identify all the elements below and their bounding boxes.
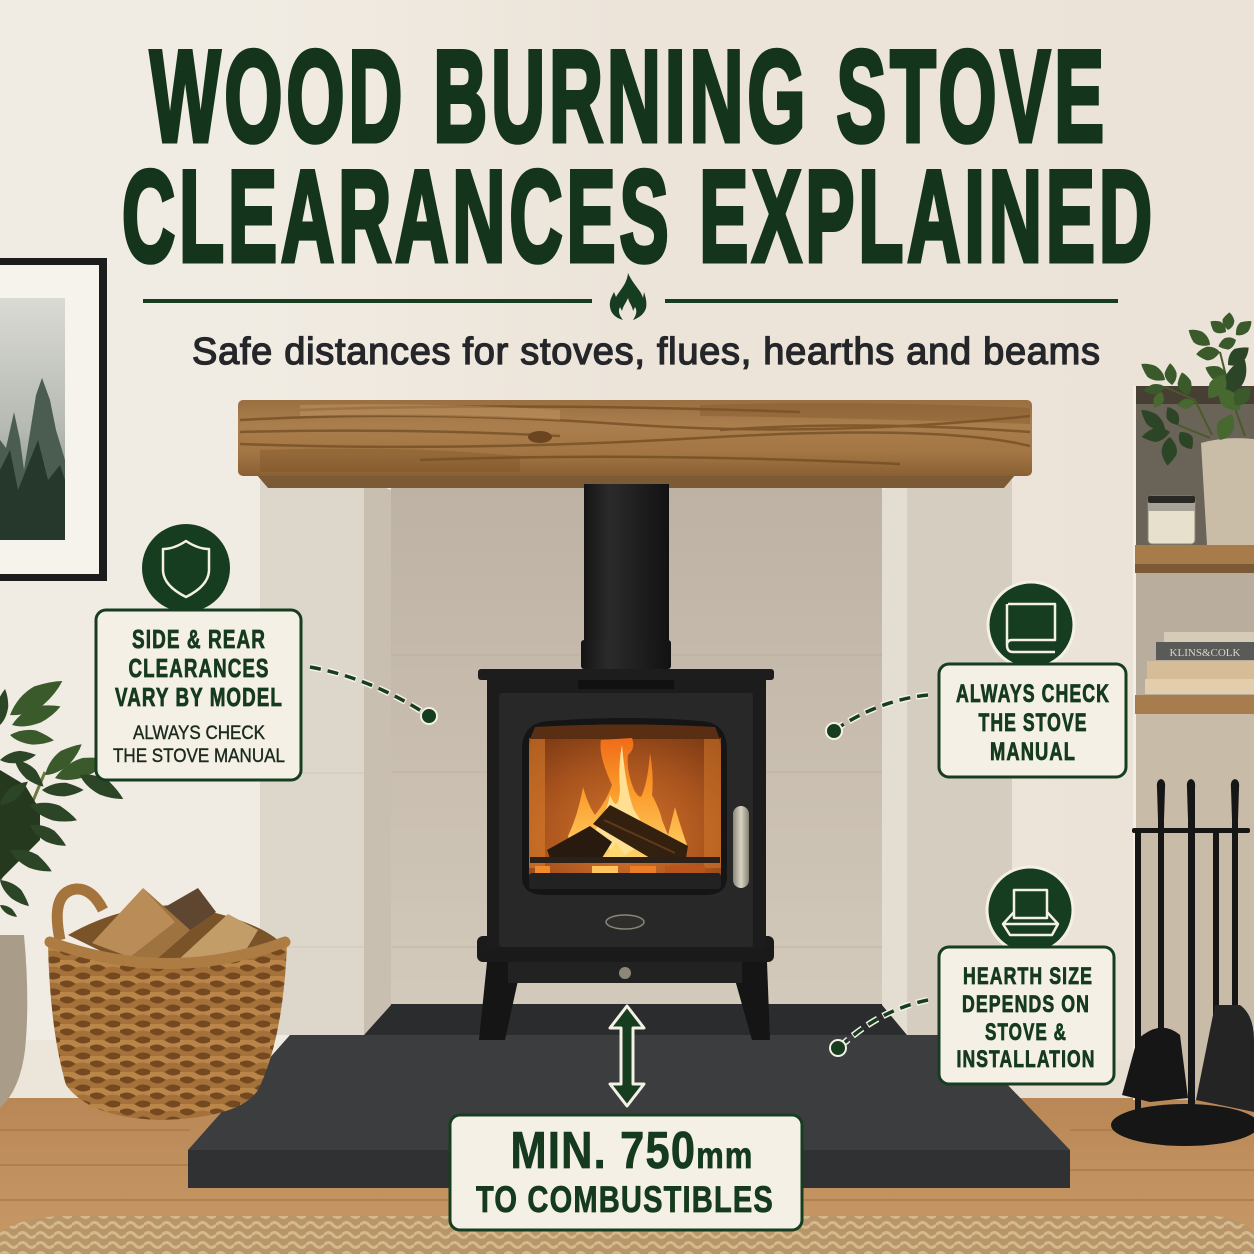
text card: MANUAL [990, 738, 1076, 766]
left pot [0, 935, 27, 1108]
text card [939, 664, 1126, 777]
text card: INSTALLATION [956, 1046, 1096, 1073]
icon: shield [142, 524, 230, 612]
oak mantel beam [238, 400, 1032, 488]
leader line and dot [310, 667, 437, 724]
logs [547, 826, 612, 858]
text card: SIDE & REAR [132, 624, 266, 654]
log basket [48, 888, 287, 1120]
text card: THE STOVE [978, 709, 1088, 737]
subtitle: Safe distances for stoves, flues, hearths and beams [192, 331, 1100, 373]
icon: hearth [987, 867, 1073, 953]
leader line and dot [830, 1000, 928, 1056]
upper shelf [1135, 545, 1254, 573]
base front [508, 962, 742, 983]
candle jar [1148, 496, 1195, 544]
skirting board [0, 1040, 1136, 1100]
stack of books [1145, 632, 1254, 694]
rug [0, 1216, 1254, 1254]
fireplace back wall [391, 488, 882, 1008]
text card: CLEARANCES [128, 653, 270, 683]
callout: hearth size [830, 867, 1114, 1084]
shelf plant [1136, 312, 1254, 466]
grate [530, 857, 720, 863]
main label: min 750mm: TO COMBUSTIBLES [476, 1179, 774, 1220]
stack of books: KLINS&COLK [1170, 647, 1240, 659]
divider with flame icon [143, 273, 1118, 320]
fireside tool set [1111, 779, 1254, 1146]
callout: side and rear clearances [96, 524, 437, 780]
right fireplace pillar [882, 480, 1012, 1035]
left plant [0, 672, 127, 920]
flames [568, 738, 687, 860]
right shelving alcove [1133, 312, 1254, 1100]
door handle [733, 806, 749, 888]
title [122, 23, 1156, 289]
brush [1122, 1028, 1188, 1102]
text card: ALWAYS CHECK [133, 723, 265, 744]
icon: manual book [988, 582, 1074, 668]
shovel [1196, 1005, 1254, 1112]
main label: min 750mm: MIN. 750mm [510, 1122, 754, 1180]
stove legs [479, 962, 522, 1040]
text card: THE STOVE MANUAL [113, 746, 285, 767]
stove door [499, 693, 753, 947]
wood floor [0, 1098, 1254, 1254]
lower shelf [1135, 695, 1254, 714]
text card: STOVE & [985, 1019, 1067, 1046]
text card: ALWAYS CHECK [956, 680, 1110, 708]
text card: VARY BY MODEL [115, 682, 283, 712]
ash door knob [606, 915, 644, 929]
text card: DEPENDS ON [962, 991, 1090, 1018]
text card: HEARTH SIZE [963, 963, 1093, 990]
fire window [522, 718, 727, 895]
text card [96, 610, 301, 780]
leader line and dot [826, 695, 928, 739]
flue pipe [581, 484, 671, 669]
callout: always check the manual [826, 582, 1126, 777]
text card [939, 947, 1114, 1084]
wood burning stove [477, 669, 774, 1040]
double headed height arrow [610, 1006, 644, 1106]
main label: min 750mm [450, 1115, 802, 1230]
framed picture [0, 258, 107, 581]
stone pot [1201, 438, 1254, 545]
left fireplace pillar [260, 480, 391, 1035]
hearth [188, 1004, 1070, 1188]
